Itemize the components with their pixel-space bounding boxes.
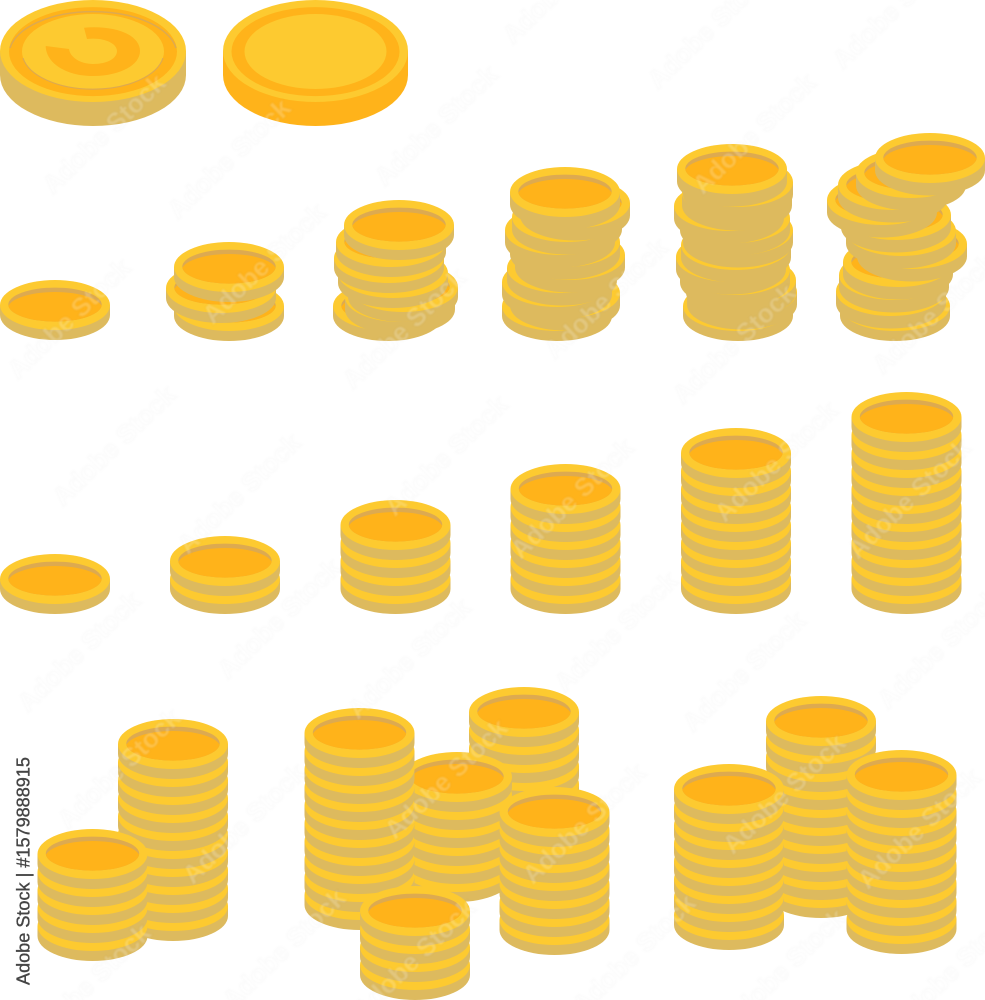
repeated diagonal watermark: Adobe Stock bbox=[666, 277, 802, 410]
neat stack: 10 coins bbox=[852, 392, 962, 614]
neat stack: 6 coins bbox=[510, 464, 620, 614]
repeated diagonal watermark: Adobe Stock bbox=[516, 757, 652, 890]
repeated diagonal watermark: Adobe Stock bbox=[378, 389, 514, 522]
repeated diagonal watermark: Adobe Stock bbox=[686, 67, 822, 200]
leaning stack: 11 coins bbox=[827, 133, 985, 341]
large plain coin bbox=[223, 0, 408, 126]
repeated diagonal watermark: Adobe Stock bbox=[504, 432, 640, 565]
repeated diagonal watermark: Adobe Stock bbox=[161, 92, 297, 225]
vertical stock id label: Adobe Stock | #1579888915 bbox=[14, 757, 34, 985]
repeated diagonal watermark: Adobe Stock bbox=[11, 585, 147, 718]
messy stack: 3 coins bbox=[166, 242, 284, 341]
repeated diagonal watermark: Adobe Stock bbox=[171, 427, 307, 560]
messy stack: 7 coins bbox=[333, 200, 458, 341]
repeated diagonal watermark: Adobe Stock bbox=[548, 565, 684, 698]
repeated diagonal watermark: Adobe Stock bbox=[676, 605, 812, 738]
repeated diagonal watermark: Adobe Stock bbox=[851, 762, 985, 895]
neat stack: 4 coins bbox=[340, 500, 450, 614]
repeated diagonal watermark: Adobe Stock bbox=[176, 757, 312, 890]
group: three stacks bbox=[674, 696, 956, 954]
repeated diagonal watermark: Adobe Stock bbox=[196, 197, 332, 330]
repeated diagonal watermark: Adobe Stock bbox=[538, 232, 674, 365]
neat stack: 8 coins bbox=[681, 428, 791, 614]
repeated diagonal watermark: Adobe Stock bbox=[341, 592, 477, 725]
repeated diagonal watermark: Adobe Stock bbox=[211, 552, 347, 685]
large coin with emblem bbox=[0, 0, 186, 126]
repeated diagonal watermark: Adobe Stock bbox=[336, 262, 472, 395]
repeated diagonal watermark: Adobe Stock bbox=[1, 252, 137, 385]
repeated diagonal watermark: Adobe Stock bbox=[378, 712, 514, 845]
repeated diagonal watermark: Adobe Stock bbox=[716, 727, 852, 860]
neat stack: 1 coin bbox=[0, 554, 110, 614]
group: two stacks bbox=[38, 719, 228, 961]
messy stack: 1 coin bbox=[0, 280, 110, 340]
repeated diagonal watermark: Adobe Stock bbox=[708, 395, 844, 528]
repeated diagonal watermark: Adobe Stock bbox=[36, 67, 172, 200]
repeated diagonal watermark: Adobe Stock bbox=[368, 59, 504, 192]
repeated diagonal watermark: Adobe Stock bbox=[46, 379, 182, 512]
messy stack: 10 coins bbox=[502, 167, 630, 341]
repeated diagonal watermark: Adobe Stock bbox=[51, 702, 187, 835]
neat stack: 2 coins bbox=[170, 536, 280, 614]
group: five stacks bbox=[304, 687, 610, 1000]
repeated diagonal watermark: Adobe Stock bbox=[841, 432, 977, 565]
messy stack: 12 coins bbox=[674, 144, 797, 341]
